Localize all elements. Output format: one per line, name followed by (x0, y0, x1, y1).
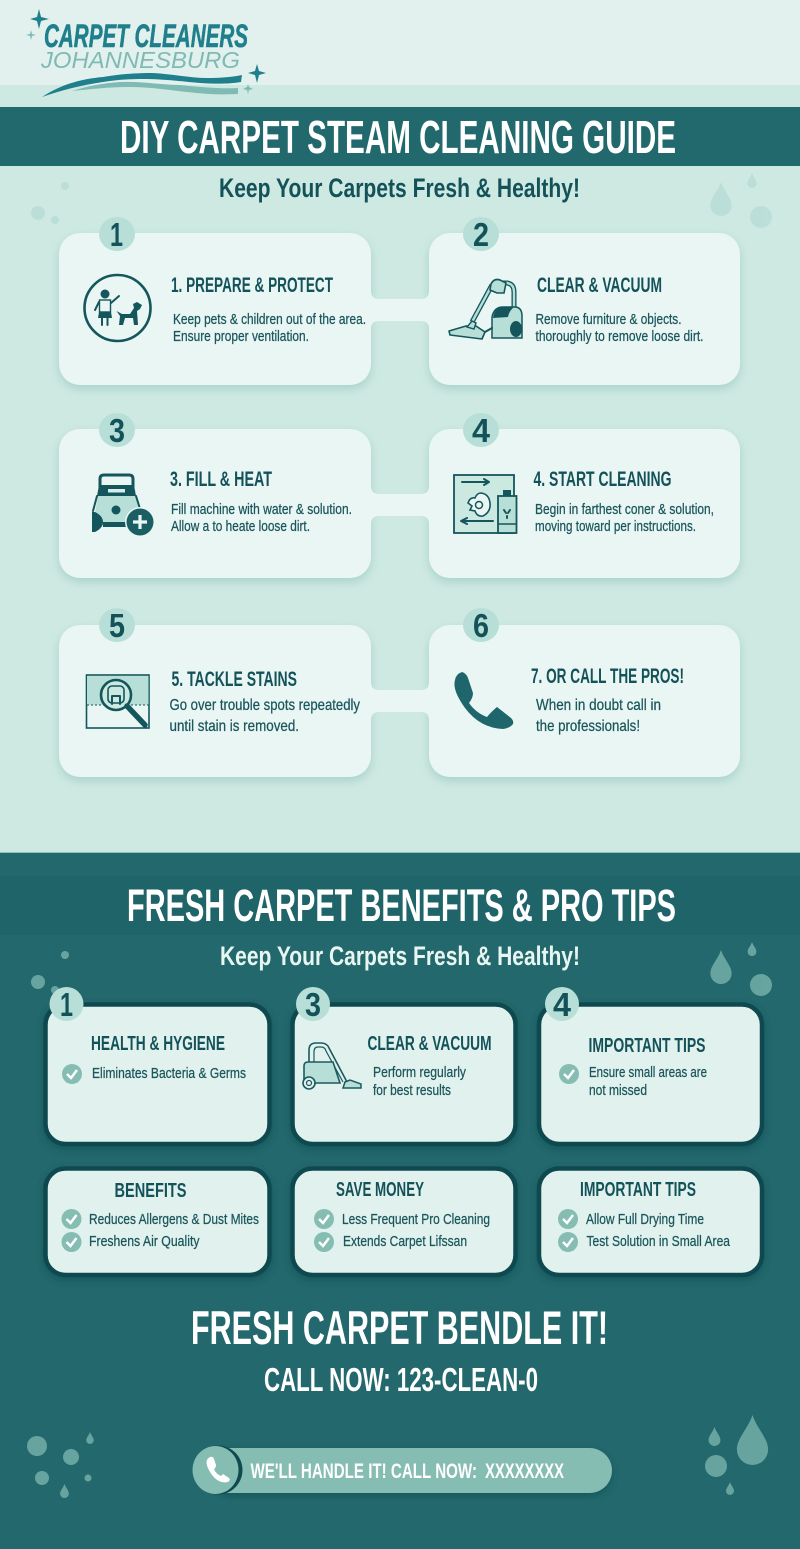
checklist item: not missed (589, 1082, 647, 1099)
icon: canister vacuum (303, 1043, 361, 1089)
step 2 text (536, 311, 704, 345)
connector row 1 (367, 280, 433, 340)
checklist (314, 1209, 490, 1252)
icon: cleaning pattern and bottle (454, 475, 516, 533)
step 1 text: Ensure proper ventilation. (173, 328, 309, 345)
call now line: CALL NOW: 123-CLEAN-0 (264, 1361, 538, 1398)
logo (26, 9, 266, 97)
badge 3: 3 (305, 986, 321, 1023)
step 1 badge (99, 216, 135, 253)
icon: steam machine (92, 475, 155, 537)
benefit card: save money (292, 1168, 516, 1275)
checklist: Less Frequent Pro Cleaning (342, 1211, 490, 1228)
badge 4: 4 (553, 986, 572, 1023)
step 6 badge: 6 (473, 607, 489, 644)
step 4 text: Begin in farthest coner & solution, (535, 501, 714, 518)
step 5 badge (99, 607, 135, 644)
badge 4 (545, 986, 579, 1023)
pill text: XXXXXXXX (485, 1460, 564, 1483)
droplets bottom right (705, 1415, 768, 1495)
heading: BENEFITS (114, 1180, 186, 1202)
badge 1 (50, 986, 84, 1023)
benefit card: important tips 1 (539, 986, 762, 1144)
step 1 heading: 1. PREPARE & PROTECT (171, 274, 333, 297)
step 6 badge (463, 607, 499, 644)
step 5 text (170, 697, 360, 735)
heading: CLEAR & VACUUM (368, 1033, 492, 1055)
step 2 text: Remove furniture & objects. (536, 311, 682, 328)
step 3 badge (99, 412, 135, 449)
step 4 badge: 4 (472, 412, 491, 449)
checklist item: Ensure small areas are (589, 1064, 707, 1081)
checklist: Reduces Allergens & Dust Mites (89, 1211, 259, 1228)
body text: for best results (373, 1082, 451, 1099)
step 4 heading: 4. START CLEANING (534, 468, 672, 491)
decorative droplets top (31, 173, 772, 228)
heading: HEALTH & HYGIENE (91, 1033, 225, 1055)
logo swoosh (42, 73, 242, 97)
step 2 text: thoroughly to remove loose dirt. (536, 328, 704, 345)
pill text: WE'LL HANDLE IT! CALL NOW: (250, 1460, 477, 1483)
step 4 text: moving toward per instructions. (535, 518, 696, 535)
badge 1: 1 (60, 986, 73, 1023)
step 6 text (536, 697, 661, 735)
step 2 badge (463, 216, 499, 253)
benefit card: health and hygiene (46, 986, 270, 1144)
step 3 text: Allow a to heate loose dirt. (171, 518, 310, 535)
benefit card: important tips 2 (539, 1168, 762, 1275)
checklist: Test Solution in Small Area (586, 1233, 731, 1250)
step 1 badge: 1 (110, 216, 123, 253)
heading: IMPORTANT TIPS (588, 1035, 706, 1057)
logo sparkles (26, 9, 266, 94)
subtitle: Keep Your Carpets Fresh & Healthy! (219, 173, 580, 203)
checklist: Freshens Air Quality (89, 1233, 200, 1250)
step 2 badge: 2 (473, 216, 489, 253)
step 4 badge (463, 412, 499, 449)
badge 3 (296, 986, 330, 1023)
step 6 card (429, 607, 740, 777)
step 6 text: the professionals! (536, 718, 640, 735)
icon: child and dog (84, 275, 150, 341)
step 5 card (59, 607, 371, 777)
step 2 heading: CLEAR & VACUUM (537, 274, 662, 297)
icon: stain magnifier (86, 675, 149, 728)
step 3 badge: 3 (109, 412, 125, 449)
checklist item: Eliminates Bacteria & Germs (92, 1065, 246, 1082)
icon: phone (454, 672, 513, 729)
body text: Perform regularly (373, 1064, 466, 1081)
connector row 3 (367, 671, 433, 731)
checklist: Extends Carpet Lifssan (343, 1233, 467, 1250)
checklist item (559, 1064, 707, 1099)
step 5 text: Go over trouble spots repeatedly (170, 697, 360, 714)
droplets bottom left (27, 1432, 94, 1498)
step 5 heading: 5. TACKLE STAINS (172, 668, 297, 691)
step 1 text (173, 311, 366, 345)
background: light section (0, 0, 800, 853)
step 3 card (59, 412, 371, 578)
step 5 badge: 5 (109, 607, 125, 644)
connector row 2 (367, 475, 433, 535)
step 6 text: When in doubt call in (536, 697, 661, 714)
checklist item (62, 1064, 246, 1084)
background: dark section (0, 852, 800, 1549)
heading: SAVE MONEY (336, 1179, 424, 1201)
step 4 card (429, 412, 740, 578)
logo: JOHANNESBURG (40, 47, 240, 73)
step 3 text (171, 501, 352, 535)
checklist (558, 1209, 731, 1252)
section 2 subtitle: Keep Your Carpets Fresh & Healthy! (220, 941, 580, 971)
step 3 text: Fill machine with water & solution. (171, 501, 352, 518)
step 2 card (429, 216, 740, 385)
decorative droplets section 2 (31, 942, 772, 996)
benefit card: clear and vacuum (292, 986, 516, 1144)
heading: IMPORTANT TIPS (580, 1179, 696, 1201)
step 4 text (535, 501, 714, 535)
step 3 heading: 3. FILL & HEAT (170, 468, 272, 491)
phone badge (192, 1446, 242, 1494)
step 6 heading: 7. OR CALL THE PROS! (531, 665, 684, 688)
icon: vacuum (449, 280, 522, 339)
step 5 text: until stain is removed. (170, 718, 299, 735)
checklist: Allow Full Drying Time (586, 1211, 704, 1228)
benefit card: benefits (46, 1168, 270, 1275)
step 1 text: Keep pets & children out of the area. (173, 311, 366, 328)
checklist (62, 1209, 259, 1252)
logo wordmark: CARPET CLEANERS (44, 18, 248, 54)
call to action pill (192, 1446, 612, 1494)
step 1 card (59, 216, 371, 385)
body text (373, 1064, 466, 1099)
